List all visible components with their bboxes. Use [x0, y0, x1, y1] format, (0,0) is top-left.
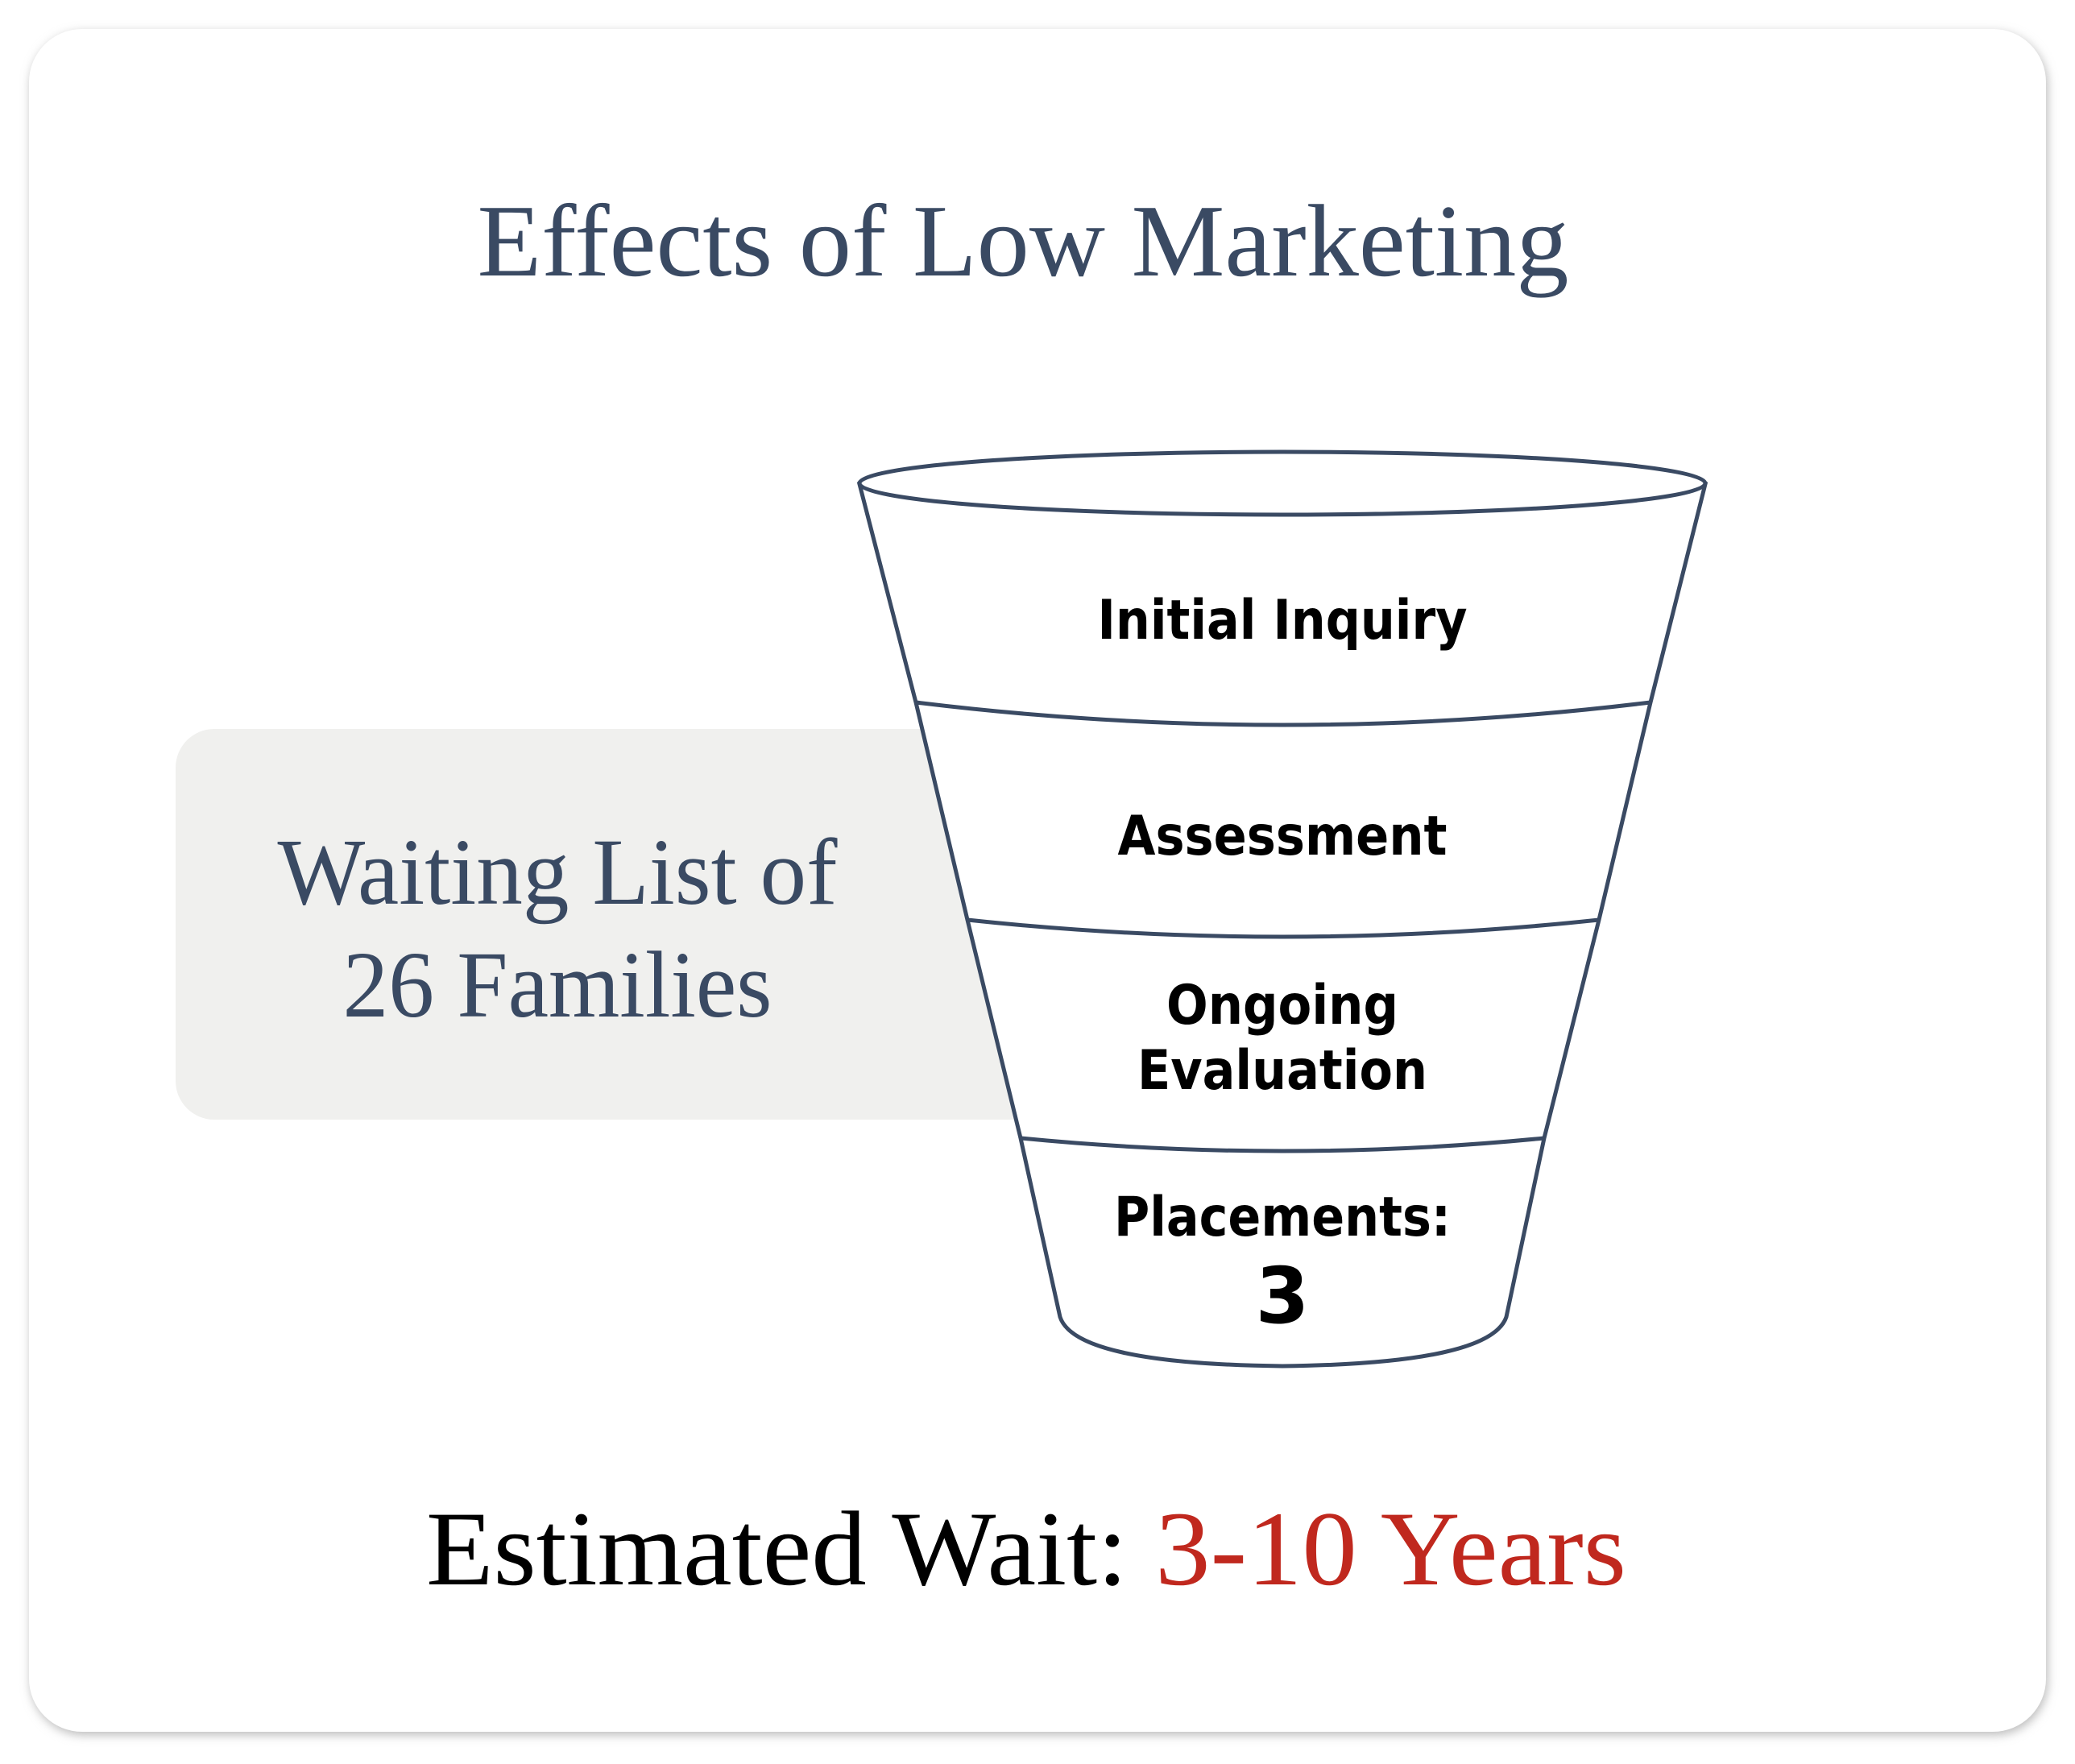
panel: waiting list — [176, 729, 1102, 1120]
text: waiting list — [277, 819, 838, 1037]
text: waiting list: Waiting List of — [277, 819, 838, 925]
funnel — [859, 452, 1705, 1366]
funnel labels: Ongoing — [1166, 974, 1398, 1037]
funnel labels: Initial Inquiry — [1097, 589, 1468, 652]
funnel labels: Assessment — [1118, 805, 1447, 868]
funnel labels: 3 — [1256, 1251, 1309, 1341]
estimated wait: Estimated Wait: 3-10 Years — [426, 1489, 1626, 1608]
title: Effects of Low Marketing — [477, 184, 1569, 298]
funnel labels: Evaluation — [1137, 1039, 1427, 1103]
funnel labels — [1097, 589, 1468, 1341]
funnel labels: Placements: — [1114, 1186, 1451, 1249]
text: waiting list: 26 Families — [343, 932, 772, 1037]
